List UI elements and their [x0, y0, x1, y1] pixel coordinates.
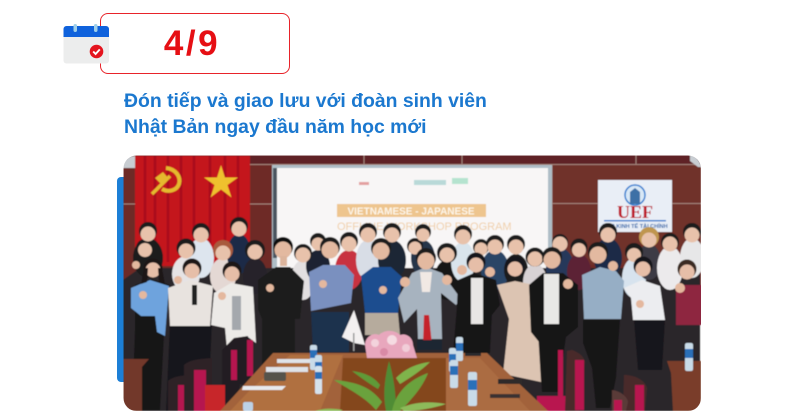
UEF sign: UEF [617, 202, 653, 222]
date box [100, 13, 290, 74]
man in light blue shirt [582, 242, 624, 408]
woman in blue shirt and black skirt [131, 258, 170, 410]
icon: calendar with check mark [64, 24, 109, 64]
dark clothing behind the crowd [123, 268, 700, 411]
accent bar [117, 177, 129, 382]
page [64, 13, 701, 411]
UEF sign [598, 180, 672, 232]
photo: group at the event [124, 156, 701, 411]
man in blue polo [361, 238, 402, 335]
woman in white jacket [210, 261, 257, 346]
table plant [315, 361, 446, 411]
flower arrangement [365, 331, 417, 358]
conference table [220, 353, 548, 411]
projection screen [272, 165, 552, 275]
right side table [667, 361, 701, 411]
wooden wall [123, 155, 701, 285]
man in blue grey shirt [309, 237, 354, 352]
small flags [342, 310, 365, 351]
left side table [123, 359, 149, 411]
table papers and devices [242, 353, 522, 398]
raised hands [132, 261, 685, 308]
man in black suit [529, 247, 578, 392]
flag [135, 156, 250, 266]
date box: 4/9 [164, 24, 220, 63]
heading [124, 90, 487, 138]
heading: Nhật Bản ngay đầu năm học mới [124, 116, 427, 138]
back row people [133, 217, 704, 300]
man in grey suit [398, 248, 461, 350]
man in black shirt [258, 237, 304, 375]
heading: Đón tiếp và giao lưu với đoàn sinh viên [124, 90, 487, 112]
UEF sign: HỌC KINH TẾ TÀI CHÍNH [602, 222, 668, 230]
woman in white shirt and black skirt [166, 258, 213, 411]
woman with red bag [676, 260, 702, 325]
projection screen: VIETNAMESE - JAPANESE [347, 206, 475, 218]
woman in beige dress [497, 256, 541, 382]
water bottles [243, 337, 693, 411]
woman in black jacket [453, 252, 500, 353]
projection screen: OFFLINE WORKSHOP PROGRAM [337, 221, 512, 233]
woman in white polo [624, 256, 665, 370]
chairs [168, 336, 647, 411]
